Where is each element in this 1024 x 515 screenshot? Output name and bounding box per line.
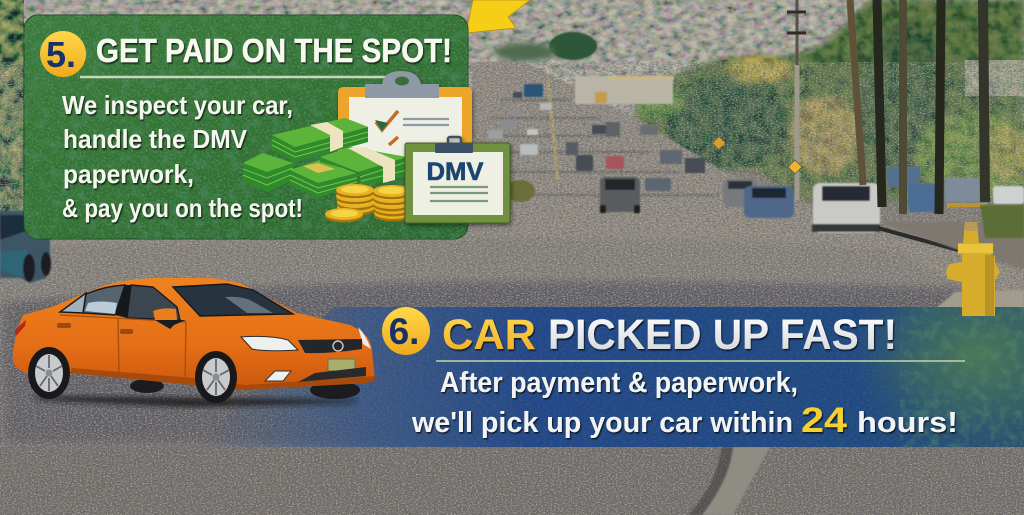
icon: DMV clipboard [405, 137, 510, 223]
stack right [320, 147, 407, 185]
parked blue car left [0, 211, 51, 283]
icon: DMV clipboard: DMV [426, 158, 484, 186]
body text: hours! [857, 407, 958, 439]
stack upper [272, 118, 368, 162]
rear wheel [28, 347, 70, 399]
panel: step 6 car picked up fast [200, 307, 1024, 447]
car windows [60, 284, 293, 320]
heading: CAR [442, 311, 536, 359]
front wheel [195, 351, 237, 403]
utility pole and palms [787, 0, 985, 214]
body text: paperwork, [63, 159, 194, 189]
number badge 6 [382, 307, 430, 355]
panel: step 5 get paid on the spot [24, 15, 510, 239]
body text [411, 367, 958, 440]
icon: yellow fire hydrant [946, 222, 1000, 316]
body text [62, 90, 303, 223]
door lines [60, 315, 186, 382]
body text: 24 [801, 401, 848, 440]
licence plate [328, 359, 355, 371]
icon: gold coins [325, 184, 412, 222]
hillside town [0, 0, 1024, 215]
number badge 6: 6. [389, 311, 419, 352]
heading: PICKED UP FAST! [548, 311, 897, 359]
car shadow [32, 396, 360, 407]
heading: GET PAID ON THE SPOT! [96, 32, 452, 69]
headlight [241, 336, 298, 351]
car body [13, 278, 375, 390]
stack left [243, 153, 293, 192]
road signs [713, 137, 802, 174]
mirror [153, 308, 177, 320]
body text: We inspect your car, [62, 90, 293, 120]
distant traffic [488, 84, 705, 191]
tree mass right [632, 0, 1024, 200]
heading underline [80, 76, 387, 78]
heading underline [436, 360, 965, 362]
body text: After payment & paperwork, [440, 367, 798, 399]
stack middle [290, 160, 357, 198]
icon: inspection clipboard [338, 71, 472, 167]
lower intake [298, 367, 366, 382]
body text: we'll pick up your car within [411, 407, 793, 439]
body text: handle the DMV [63, 124, 248, 154]
underside wheels [130, 379, 164, 393]
number badge 5 [40, 31, 86, 77]
number badge 5: 5. [46, 34, 76, 75]
mottled green corner of the banner [840, 307, 1024, 447]
grille [298, 339, 362, 353]
orange car [13, 278, 375, 407]
building [575, 76, 674, 104]
cars on road [600, 167, 1024, 233]
icon: stacks of cash [243, 118, 407, 198]
bush [505, 180, 535, 202]
curb and sidewalk [688, 203, 1024, 515]
yellow arrow [466, 0, 530, 33]
body text: & pay you on the spot! [62, 193, 303, 223]
